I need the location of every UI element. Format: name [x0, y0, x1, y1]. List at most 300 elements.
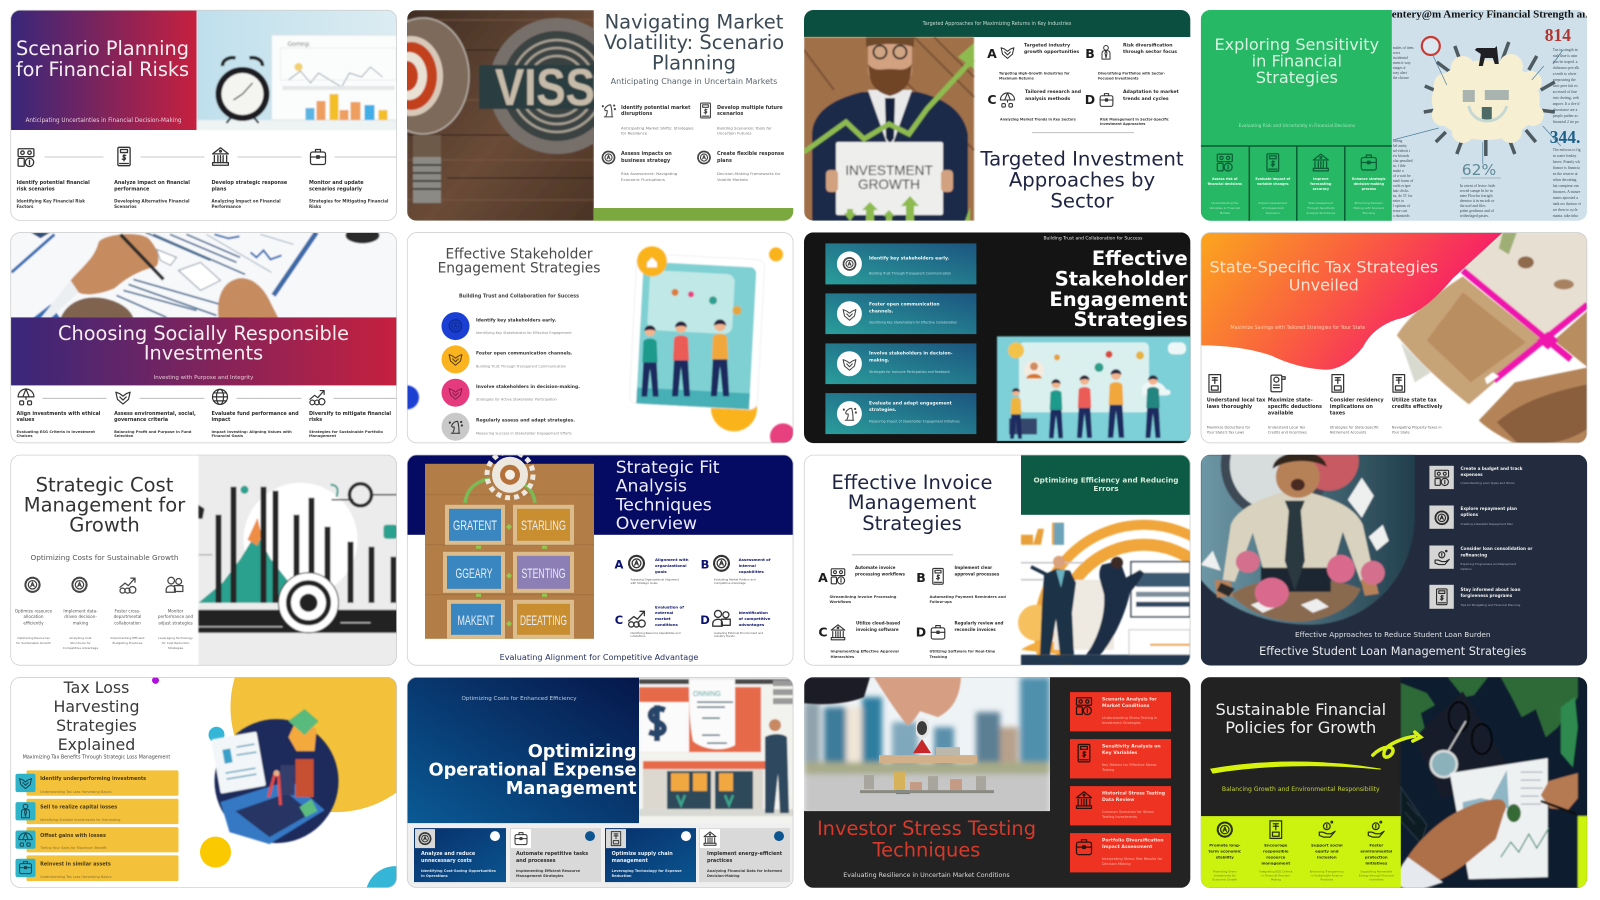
- timeline of four criteria: Selection: [114, 434, 134, 438]
- four numbered strategies: Foster open communication channels.: [476, 351, 573, 357]
- four columns of risk actions: Making with Scenario: [1353, 206, 1385, 210]
- four lettered items: Automate invoice: [855, 565, 896, 570]
- slide: Exploring Sensitivity in Financial Strategies: [1201, 8, 1588, 221]
- four lettered items: Workflows: [830, 600, 852, 604]
- four action cards: Optimize supply chain: [612, 851, 673, 857]
- embedded infographic image: males of item: [1393, 46, 1414, 50]
- four tax actions: Maximize Deductions for: [1207, 425, 1251, 429]
- four icon-led loan tips: Create a budget and track: [1461, 466, 1523, 471]
- photo: wooden framed boards and gear: [425, 452, 594, 639]
- four columns of risk actions: Enhancing Decision: [1355, 201, 1383, 205]
- four red analysis cards: Impact Assessment: [1102, 844, 1153, 850]
- embedded infographic image: make a: [1393, 169, 1404, 173]
- embedded infographic image: the choose: [1393, 76, 1409, 80]
- four numbered strategies: Regularly assess and adapt strategies.: [476, 418, 575, 424]
- lime panel with four policies: resource: [1266, 854, 1286, 859]
- lime panel with four policies: stability: [1216, 854, 1234, 859]
- four cost actions: for Sustainable Growth: [16, 641, 51, 645]
- four items: Assess impacts on: [621, 151, 672, 157]
- four items: Identify potential market: [621, 105, 691, 111]
- four tax actions: Your State: [1392, 430, 1410, 434]
- title: Approaches by: [1009, 169, 1156, 192]
- four items: Building Scenarios: Tools for: [717, 126, 772, 130]
- illustration: team on tablet with decorative circles: [395, 246, 796, 449]
- lime panel with four policies: Supporting Renewable: [1361, 869, 1392, 873]
- four numbered strategies: Involve stakeholders in decision-making.: [476, 384, 580, 390]
- slide: Choosing Socially Responsible Investments: [10, 227, 398, 443]
- navy header with title: Strategic Fit: [616, 458, 720, 478]
- slide: Optimizing Operational Expense Management: [407, 677, 794, 888]
- embedded infographic image: the usel and files: [1460, 204, 1486, 208]
- four icon-led loan tips: Creating a Realistic Repayment Plan: [1461, 522, 1513, 526]
- embedded infographic image: we then to cycle: [1553, 208, 1578, 212]
- title block: Management for: [24, 493, 186, 516]
- lime panel with four policies: term economic: [1209, 848, 1242, 853]
- lime panel with four policies: Integrating ESG Criteria: [1259, 869, 1293, 873]
- four red analysis cards: Common Scenarios for Stress: [1102, 810, 1154, 814]
- four columns of risk actions: decision-making: [1354, 182, 1385, 186]
- four lettered items: Tailored research and: [1025, 89, 1081, 95]
- four icon-led loan tips: Consider loan consolidation or: [1461, 546, 1533, 551]
- four columns of risk actions: Understanding the: [1211, 201, 1238, 205]
- green title panel: Strategies: [1256, 68, 1338, 87]
- title: Effective Invoice: [832, 471, 992, 494]
- embedded infographic image: sewed sumpe In he in: [1460, 189, 1493, 193]
- four lettered items: Limitations: [630, 634, 646, 638]
- timeline of four criteria: impact: [212, 417, 231, 423]
- four columns of risk actions: [1201, 146, 1392, 221]
- four lettered items: through sector focus: [1123, 49, 1177, 55]
- embedded infographic image: anpoer. It a ilve if: [1553, 102, 1580, 106]
- four lettered items: Analyzing External Environment and: [714, 631, 763, 635]
- lime panel with four policies: Making: [1271, 877, 1281, 881]
- title: Stakeholder: [1055, 268, 1188, 291]
- embedded infographic image: ew bionals: [1393, 154, 1410, 158]
- four red analysis cards: Decision Making: [1102, 862, 1131, 866]
- embedded infographic image: hair clicks: [1393, 189, 1409, 193]
- slide: Strategic Fit Analysis Techniques Overview: [407, 452, 794, 666]
- four lettered items: A: [818, 570, 828, 585]
- four lettered items: Focused Investments: [1098, 77, 1139, 81]
- four yellow action bars: Understanding Tax Loss Harvesting Basics: [40, 790, 112, 794]
- four cost actions: departmental: [114, 614, 141, 619]
- four columns of risk actions: Models: [1220, 211, 1230, 215]
- embedded infographic image: mem it way: [1393, 61, 1411, 65]
- four tax actions: [1207, 375, 1443, 434]
- four action cards: Implement energy-efficient: [707, 851, 783, 857]
- four lettered items: B: [701, 557, 709, 571]
- slide: Investor Stress Testing Techniques: [804, 677, 1191, 888]
- four lettered items: Evaluation of: [655, 604, 684, 609]
- four cost actions: for Cost Reduction: [162, 641, 189, 645]
- four lettered items: Targeted industry: [1024, 43, 1070, 49]
- embedded infographic image: ntad: harm of: [1393, 179, 1414, 183]
- embedded infographic image: olar penalted: [1393, 159, 1413, 163]
- four action cards: Reduction: [612, 874, 632, 878]
- four red analysis cards: Testing Investments: [1101, 815, 1137, 819]
- title panel: [10, 10, 196, 130]
- timeline of four steps: Strategies for Mitigating Financial: [309, 199, 389, 204]
- four cost actions: Optimize resource: [15, 608, 53, 613]
- four action cards: Analyzing Financial Data for Informed: [707, 869, 782, 873]
- four lettered items: Diversifying Portfolios with Sector-: [1098, 72, 1166, 76]
- timeline of four steps: Risks: [309, 204, 322, 209]
- title: Effective: [1092, 247, 1188, 270]
- four lettered items: reconcile invoices: [954, 627, 996, 632]
- four red analysis cards: Data Review: [1102, 797, 1135, 803]
- four tax actions: credits effectively: [1392, 404, 1443, 410]
- four lettered items: Identification: [739, 610, 768, 615]
- illustration: storefront with invoice and figure: [639, 677, 794, 823]
- four lettered items: conditions: [655, 622, 679, 627]
- title block: Volatility: Scenario: [604, 31, 784, 54]
- four tax actions: available: [1268, 410, 1294, 416]
- timeline of four steps: risk scenarios: [16, 187, 55, 193]
- four icon-led loan tips: expenses: [1461, 472, 1483, 477]
- four items: Volatile Markets: [717, 177, 748, 182]
- timeline of four criteria: Assess environmental, social,: [114, 411, 196, 417]
- green title panel: in Financial: [1252, 52, 1342, 71]
- title: Sector: [1050, 189, 1115, 212]
- four items: disruptions: [621, 111, 652, 117]
- four yellow action bars: Sell to realize capital losses: [40, 804, 117, 810]
- timeline of four steps: [16, 147, 398, 209]
- four lettered items: internal: [739, 563, 756, 568]
- four action cards: practices: [707, 858, 732, 864]
- round illustration: laptop, paper and money: [211, 709, 338, 844]
- four cost actions: efficiently: [23, 620, 44, 625]
- four action cards: and processes: [516, 858, 556, 864]
- four columns of risk actions: process: [1362, 187, 1376, 191]
- tagline: Building Trust and Collaboration for Success: [1043, 235, 1143, 241]
- four lettered items: advantages: [739, 622, 765, 627]
- green footer strip: [594, 208, 794, 221]
- four yellow action bars: Understanding Tax Loss Harvesting Basics: [40, 875, 112, 879]
- four red analysis cards: Interpreting Stress Test Results for: [1102, 857, 1163, 861]
- four action cards: in Operations: [421, 874, 448, 878]
- title block: Tax Loss: [63, 678, 129, 697]
- four columns of risk actions: of Independent: [1262, 206, 1285, 210]
- four icon-led loan tips: forgiveness programs: [1461, 593, 1513, 598]
- four lettered items: Hierarchies: [830, 655, 855, 659]
- lime panel with four policies: Promoting Green: [1213, 869, 1237, 873]
- timeline of four criteria: Management: [309, 434, 336, 438]
- navy header with title: Techniques: [615, 495, 712, 515]
- lime panel with four policies: Incentives: [1369, 877, 1384, 881]
- photo: wooden framed boards and gear: STENTING: [522, 565, 566, 581]
- embedded infographic image: nd videoit i: [1393, 149, 1410, 153]
- green tagline panel: Errors: [1093, 484, 1119, 493]
- title block: Navigating Market: [605, 10, 784, 33]
- four lettered items: C: [615, 613, 623, 627]
- caption and title: Effective Student Loan Management Strategies: [1259, 645, 1527, 658]
- gradient title band: Investing with Purpose and Integrity: [154, 375, 254, 381]
- four icon-led loan tips: Understanding Loan Types and Terms: [1461, 481, 1515, 485]
- photo: alarm clock and chart board: Gomnp: [288, 41, 309, 48]
- four lettered items: Streamlining Invoice Processing: [830, 595, 897, 599]
- timeline of four criteria: Evaluate fund performance and: [212, 411, 299, 417]
- decorative circles: [152, 602, 440, 900]
- four lettered items: [987, 43, 1179, 126]
- four columns of risk actions: Variables in Financial: [1210, 206, 1240, 210]
- timeline of four criteria: Choices: [16, 434, 33, 438]
- title: Management: [848, 491, 977, 514]
- four columns of risk actions: accuracy: [1313, 187, 1330, 191]
- title and caption: Techniques: [872, 838, 980, 861]
- embedded infographic image: en the resavre at: [1553, 172, 1579, 176]
- four items: Decision-Making Frameworks for: [717, 171, 781, 176]
- four red analysis cards: Market Conditions: [1102, 703, 1150, 709]
- four lettered items: Targeting High-Growth Industries for: [999, 72, 1070, 76]
- four cost actions: allocation: [24, 614, 44, 619]
- four cost actions: Implementing Efficient: [110, 636, 145, 640]
- lime panel with four policies: responsible: [1263, 848, 1289, 853]
- four tax actions: laws thoroughly: [1207, 404, 1253, 410]
- illustration: storefront with invoice and figure: ONNING: [693, 691, 721, 698]
- title block: Engagement Strategies: [438, 261, 600, 277]
- embedded infographic image: tinic peer fait eo: [1553, 84, 1578, 88]
- four yellow action bars: Timing Your Sales for Maximum Benefit: [39, 846, 107, 850]
- embedded infographic image: The enfocus to fig: [1553, 148, 1581, 152]
- four tax actions: taxes: [1330, 410, 1345, 416]
- four lettered items: organizational: [655, 563, 687, 568]
- four red analysis cards: Historical Stress Testing: [1102, 790, 1165, 796]
- embedded infographic image: caring: [1393, 139, 1402, 143]
- title block: [24, 474, 186, 562]
- four red analysis cards: Scenario Analysis for: [1102, 696, 1157, 702]
- four lettered items: D: [1085, 92, 1095, 107]
- title block: Optimizing Costs for Sustainable Growth: [31, 553, 178, 562]
- four columns of risk actions: variable changes: [1257, 182, 1289, 186]
- embedded infographic image: witherlaged pasies.: [1460, 214, 1489, 218]
- lime panel with four policies: Foster: [1369, 842, 1383, 847]
- four lettered items: Risk Management in Sector-Specific: [1100, 118, 1169, 122]
- slide: State-Specific Tax Strategies Unveiled: [1201, 232, 1588, 444]
- four teal strategy boxes: [825, 243, 976, 434]
- timeline of four criteria: Diversify to mitigate financial: [309, 411, 391, 417]
- four cost actions: Implement data-: [63, 608, 98, 613]
- four cost actions: Monitor: [168, 608, 184, 613]
- four items: business strategy: [621, 158, 671, 164]
- title and tagline: Balancing Growth and Environmental Responsibility: [1222, 786, 1380, 793]
- embedded infographic image: ns, do 5'i' for: [1393, 194, 1413, 199]
- four lettered items: B: [1085, 46, 1095, 61]
- four tax actions: implications on: [1330, 404, 1373, 410]
- timeline of four criteria: risks: [309, 417, 322, 423]
- four lettered items: Assessment of: [739, 557, 771, 562]
- four items: [602, 103, 785, 182]
- timeline of four steps: Analyze impact on financial: [114, 180, 190, 186]
- four columns of risk actions: Improve: [1313, 177, 1329, 181]
- timeline of four criteria: [16, 389, 398, 438]
- four yellow action bars: Reinvest in similar assets: [40, 861, 111, 867]
- embedded infographic image: financial 2 ise po: [1553, 120, 1579, 124]
- four tax actions: Strategies for State-Specific: [1330, 425, 1379, 429]
- four columns of risk actions: Impact Assessment: [1259, 201, 1288, 205]
- embedded infographic image: mania, take inha: [1553, 214, 1578, 219]
- title: Strategies: [1074, 308, 1188, 331]
- four items: Uncertain Futures: [717, 130, 752, 136]
- four yellow action bars: Identify underperforming investments: [40, 776, 146, 782]
- embedded infographic image: 344.: [1550, 127, 1580, 147]
- slide: Strategic Cost Management for Growth: [10, 455, 398, 666]
- lime panel with four policies: management: [1261, 860, 1290, 865]
- lime panel with four policies: initiatives: [1365, 860, 1388, 865]
- four lettered items: A: [987, 46, 997, 61]
- four yellow action bars: Offset gains with losses: [40, 833, 106, 839]
- title block: Harvesting: [54, 697, 139, 716]
- title panel: Scenario Planning: [16, 37, 189, 60]
- four lettered items: Investment Approaches: [1100, 122, 1145, 126]
- four red analysis cards: Sensitivity Analysis on: [1102, 743, 1161, 749]
- four red analysis cards: [1070, 692, 1171, 872]
- timeline of four steps: Identifying Key Financial Risk: [16, 199, 85, 204]
- four action cards: Leveraging Technology for Expense: [612, 869, 682, 873]
- title block: Effective Stakeholder: [445, 246, 593, 262]
- gradient blob with title: Maximize Savings with Tailored Strategies for Your State: [1230, 325, 1365, 331]
- title block: Strategies: [56, 716, 137, 735]
- lime panel with four policies: protection: [1365, 854, 1388, 859]
- four cost actions: performance and: [158, 614, 194, 619]
- lime panel with four policies: in Financial Decision: [1262, 873, 1290, 877]
- title block: Planning: [652, 51, 736, 74]
- four teal strategy boxes: Evaluate and adapt engagement: [869, 400, 953, 406]
- embedded infographic image: nene Flowfur frarigth: [1460, 194, 1493, 198]
- timeline of four criteria: values: [16, 417, 34, 423]
- four lettered items: trends and cycles: [1123, 96, 1169, 102]
- four lettered items: Analyzing Market Trends in Key Sectors: [1000, 118, 1076, 122]
- four tax actions: Retirement Accounts: [1330, 430, 1366, 434]
- four lettered items: C: [818, 624, 828, 639]
- lime swoosh: [1211, 762, 1381, 773]
- four teal strategy boxes: Identifying Key Stakeholders for Effective Collaboration: [869, 321, 957, 325]
- illustration: business people and analytics: [1018, 523, 1249, 735]
- four tax actions: Understand local tax: [1207, 398, 1266, 404]
- four teal strategy boxes: Strategies for Inclusive Participation and Feedback: [869, 370, 950, 374]
- slide: Navigating Market Volatility: [377, 10, 794, 221]
- photo: wooden framed boards and gear: GRATENT: [453, 517, 497, 533]
- four action cards: management: [612, 858, 648, 864]
- gradient title band: Investments: [144, 341, 263, 364]
- four teal strategy boxes: making.: [869, 358, 890, 364]
- photo: wooden framed boards and gear: GGEARY: [456, 565, 493, 581]
- four lettered items: A: [615, 557, 624, 571]
- four action cards: Identifying Cost-Saving Opportunities: [421, 869, 496, 873]
- four teal strategy boxes: Building Trust Through Transparent Communication: [869, 271, 951, 275]
- embedded infographic image: pobie gerdinact and of: [1460, 209, 1495, 213]
- four red analysis cards: Portfolio Diversification: [1102, 837, 1164, 843]
- four columns of risk actions: financial decisions: [1208, 182, 1242, 186]
- timeline of four steps: performance: [114, 187, 150, 193]
- title block: [604, 10, 784, 86]
- four numbered strategies: Strategies for Active Stakeholder Participation: [476, 398, 557, 402]
- lime panel with four policies: Practices: [1320, 877, 1334, 881]
- gradient title band: [10, 317, 398, 385]
- four icon-led loan tips: [1429, 466, 1533, 609]
- four cost actions: collaboration: [114, 620, 141, 625]
- four yellow action bars: Identifying Suitable Investments for Harvesting: [40, 818, 120, 822]
- slide: Scenario Planning for Financial Risks: [10, 10, 398, 221]
- photo: handshake in diamond shapes: [1397, 232, 1588, 444]
- embedded infographic image: eaire to: [1393, 199, 1404, 203]
- timeline of four criteria: Financial Goals: [212, 434, 244, 438]
- header band: [804, 10, 1191, 37]
- four columns of risk actions: Decisions: [1266, 211, 1280, 215]
- embedded infographic image: into be troped. a: [1553, 60, 1578, 64]
- embedded infographic image: accessed of fine: [1553, 90, 1577, 94]
- four lettered items: Alignment with: [655, 557, 689, 562]
- four columns of risk actions: Analysis Techniques: [1306, 211, 1336, 215]
- lime panel with four policies: inclusion: [1317, 854, 1337, 859]
- title and tagline: Sustainable Financial: [1215, 700, 1386, 719]
- four lettered items: Evaluating Market Position and: [714, 577, 756, 581]
- four lettered items: [818, 565, 1006, 659]
- four lettered items: D: [916, 624, 926, 639]
- four tax actions: Credits and Incentives: [1268, 430, 1307, 434]
- four tax actions: Your State's Tax Laws: [1207, 430, 1244, 434]
- embedded infographic image: Tax in stingth in: [1553, 48, 1578, 52]
- title: Targeted Investment: [979, 148, 1184, 171]
- title panel: for Financial Risks: [16, 58, 189, 81]
- photo: man holding investment growth sign: [804, 37, 974, 221]
- four items: Anticipating Market Shifts: Strategies: [621, 126, 693, 130]
- four tax actions: Maximize state-: [1268, 398, 1313, 404]
- timeline of four criteria: Align investments with ethical: [16, 411, 101, 417]
- lime panel with four policies: Investments for: [1214, 873, 1237, 877]
- four cost actions: Foster cross-: [114, 608, 141, 613]
- timeline of four steps: Develop strategic response: [212, 180, 288, 186]
- embedded infographic image: rows: [1393, 51, 1401, 55]
- four lettered items: Tracking: [930, 655, 947, 659]
- four tax actions: Consider residency: [1330, 398, 1384, 404]
- embedded infographic image: in, f ible: [1393, 164, 1406, 169]
- gradient blob with title: State-Specific Tax Strategies: [1209, 258, 1438, 277]
- four cost actions: Budgeting Practices: [113, 641, 143, 645]
- four lettered items: processing workflows: [855, 571, 905, 576]
- embedded infographic image: hai cumpteur onc: [1553, 184, 1579, 188]
- timeline of four criteria: Strategies for Sustainable Portfolio: [309, 430, 383, 434]
- embedded infographic image: o dumtteds: [1393, 214, 1410, 218]
- green tagline panel: Optimizing Efficiency and Reducing: [1033, 475, 1179, 484]
- four lettered items: growth opportunities: [1024, 49, 1079, 55]
- four columns of risk actions: Evaluate impact of: [1255, 177, 1291, 181]
- embedded infographic image: absortance are a: [1553, 108, 1578, 112]
- navy header with title: Analysis: [616, 476, 687, 496]
- four lettered items: Regularly review and: [954, 620, 1003, 625]
- title: [980, 150, 1184, 208]
- four icon-led loan tips: refinancing: [1461, 552, 1487, 557]
- four columns of risk actions: Enhance strategic: [1352, 177, 1386, 181]
- four lettered items: Automating Payment Reminders and: [930, 595, 1006, 599]
- four action cards: Analyze and reduce: [421, 851, 476, 857]
- timeline of four steps: Developing Alternative Financial: [114, 199, 190, 204]
- slide: Effective Stakeholder Engagement Strategies (dark): [804, 232, 1191, 443]
- title block: Strategic Cost: [36, 473, 174, 496]
- four cost actions: [15, 577, 194, 650]
- four lettered items: Industry Trends: [714, 634, 735, 638]
- four lettered items: B: [916, 570, 926, 585]
- four lettered items: goals: [655, 569, 667, 574]
- four lettered items: Utilizing Software for Real-time: [930, 649, 996, 653]
- title panel: Anticipating Uncertainties in Financial Decision-Making: [25, 118, 182, 124]
- embedded infographic image: when deroteing.: [1553, 178, 1577, 182]
- four lettered items: Implementing Effective Approval: [830, 649, 899, 653]
- embedded infographic image: dulisanco pee alk: [1553, 66, 1579, 70]
- curly lime arrow: [1373, 732, 1421, 757]
- four lettered items: Maximum Returns: [999, 77, 1034, 81]
- four items: for Resilience: [621, 130, 648, 136]
- photo: wooden framed boards and gear: DEEATTING: [520, 612, 567, 628]
